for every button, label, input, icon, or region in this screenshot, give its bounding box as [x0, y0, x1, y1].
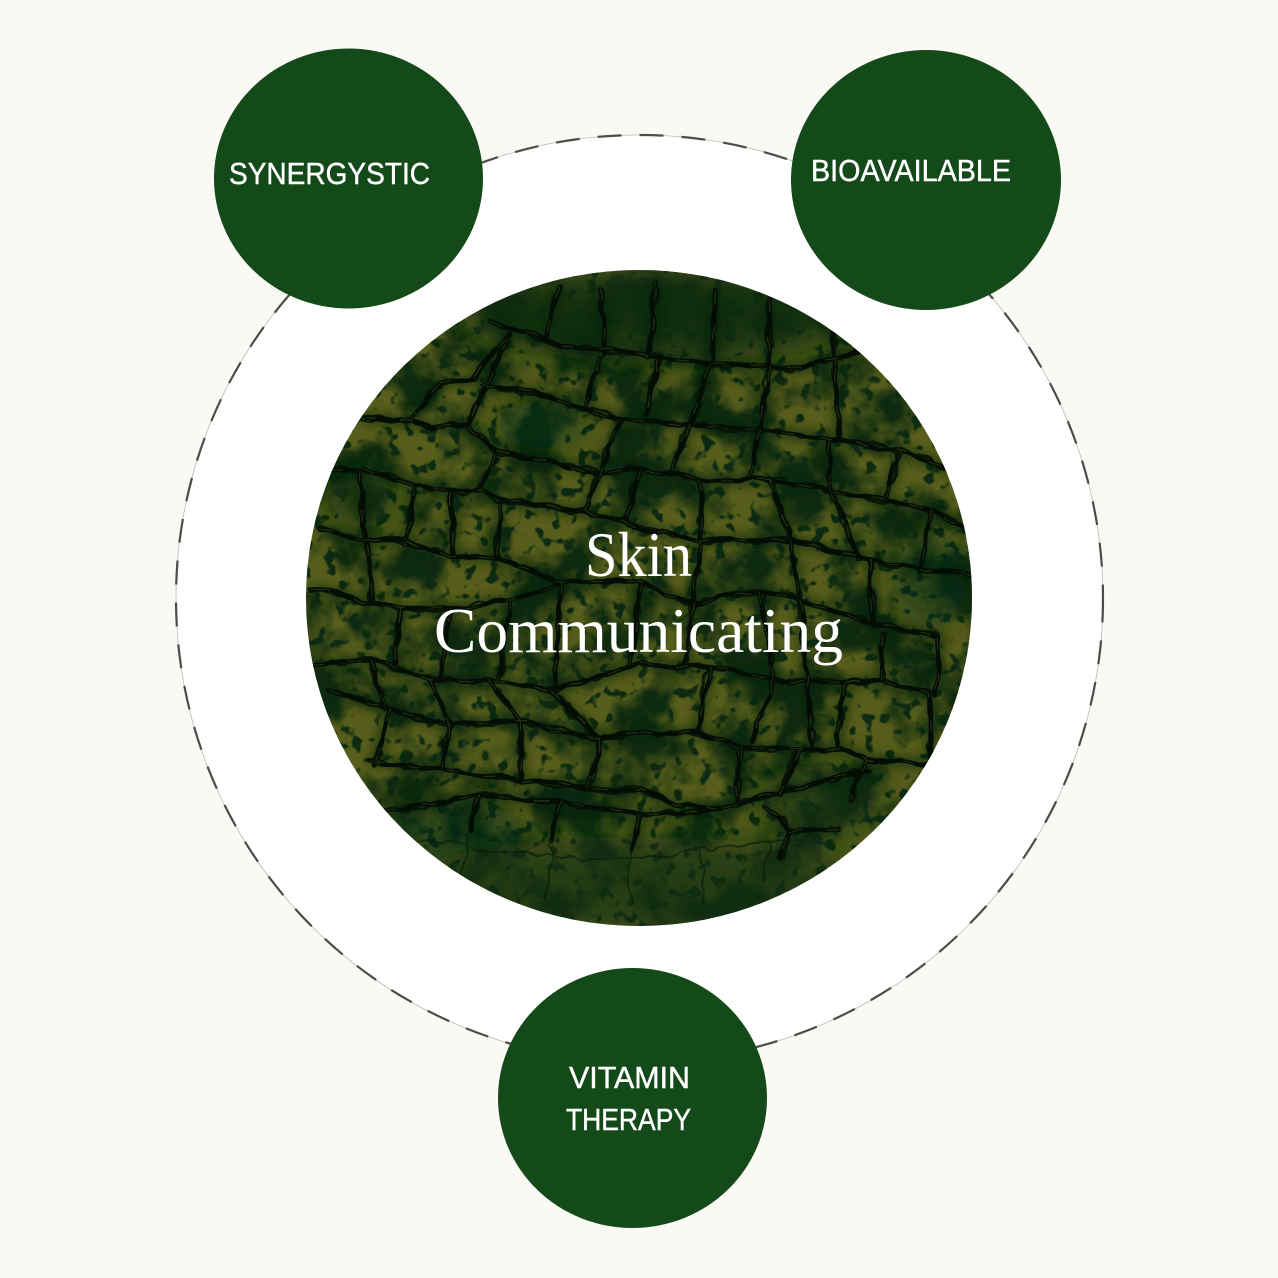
- node: vitamin therapy: THERAPY: [566, 1102, 691, 1137]
- node: bioavailable: [791, 50, 1061, 310]
- node: synergystic: SYNERGYSTIC: [229, 156, 430, 191]
- center title: Skin: [585, 520, 692, 590]
- central textured skin circle: [300, 260, 980, 940]
- node: vitamin therapy: VITAMIN: [569, 1060, 690, 1095]
- outer white ring with dashed border: [176, 135, 1103, 1062]
- node: bioavailable: BIOAVAILABLE: [811, 153, 1011, 188]
- center title: Communicating: [434, 596, 843, 666]
- infographic diagram: [174, 48, 1104, 1228]
- node: vitamin therapy: [498, 968, 767, 1228]
- center title: [434, 520, 843, 666]
- node: synergystic: [214, 48, 483, 308]
